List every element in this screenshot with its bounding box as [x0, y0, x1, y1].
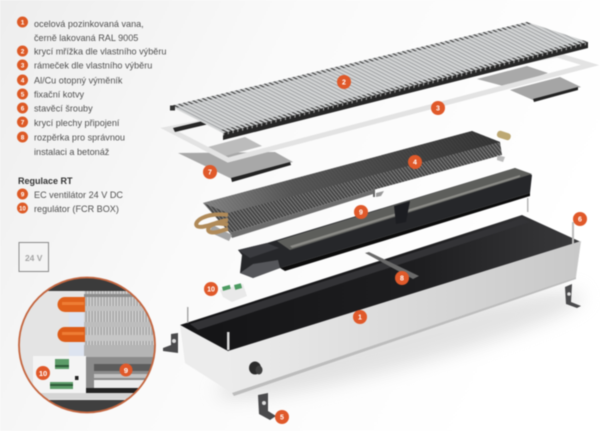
legend item 1: 1 — [21, 20, 25, 26]
detail circle: pipes and regulator — [15, 275, 160, 415]
legend item 9: EC ventilátor 24 V DC — [34, 190, 123, 200]
legend item 10: 10 — [19, 206, 26, 212]
legend: regulation list — [17, 188, 123, 214]
legend item 4: Al/Cu otopný výměník — [34, 76, 123, 86]
icon: 24 V box — [19, 242, 48, 272]
regulator box — [220, 283, 247, 302]
badge 1: 1 — [358, 314, 362, 322]
legend item 8 — [17, 132, 125, 157]
badge 6 — [573, 212, 587, 226]
legend: component list — [17, 16, 166, 157]
regulator board — [50, 359, 78, 389]
legend item 9: 9 — [21, 192, 25, 198]
legend item 8: 8 — [21, 134, 25, 142]
badge 9: 9 — [359, 210, 363, 216]
legend item 2: 2 — [21, 48, 25, 56]
badge 10 in circle — [36, 366, 50, 380]
frame — [168, 55, 590, 160]
legend item 7: krycí plechy připojení — [34, 118, 120, 128]
legend item 8: rozpěrka pro správnou — [34, 132, 125, 142]
badge 8 — [395, 271, 409, 285]
tub — [180, 215, 581, 396]
orange pipes — [58, 297, 85, 342]
badge 2: 2 — [342, 80, 346, 86]
legend item 5: 5 — [21, 92, 25, 98]
badge 4 — [408, 155, 422, 169]
badge 4: 4 — [413, 160, 417, 166]
legend item 8: instalaci a betonáž — [34, 147, 110, 157]
legend item 6: 6 — [21, 106, 25, 112]
legend item 4: 4 — [21, 78, 25, 84]
shadow below tub — [211, 275, 589, 415]
legend item 2: krycí mřížka dle vlastního výběru — [34, 46, 166, 56]
legend item 10: regulátor (FCR BOX) — [34, 204, 119, 214]
badge 7 — [203, 165, 217, 179]
legend item 1: černě lakovaná RAL 9005 — [34, 33, 138, 43]
badge 3 — [431, 101, 445, 115]
legend item 1: ocelová pozinkovaná vana, — [34, 19, 144, 29]
badge 8: 8 — [400, 276, 404, 282]
badge 6: 6 — [578, 216, 582, 224]
legend item 7: 7 — [21, 120, 25, 126]
cable gland — [249, 362, 262, 374]
badge 5 — [275, 410, 289, 424]
anchor bracket, right — [565, 284, 581, 308]
badge 2 — [337, 75, 351, 89]
brass fittings — [496, 130, 512, 141]
badge 10 — [204, 282, 218, 296]
anchor bracket, front — [258, 393, 276, 420]
EC fan unit — [238, 168, 532, 278]
cover plates, left — [178, 137, 293, 182]
badge 3: 3 — [436, 106, 440, 112]
badge 10 in circle: 10 — [39, 369, 47, 378]
legend item 5: fixační kotvy — [34, 90, 84, 100]
legend item 5 — [17, 88, 84, 100]
cover plates, right — [477, 66, 581, 102]
spacer bar — [365, 252, 419, 279]
heat exchanger — [196, 130, 512, 241]
grille — [170, 22, 588, 140]
heading: Regulace RT: Regulace RT — [18, 176, 73, 186]
badge 9 — [354, 205, 368, 219]
badge 7: 7 — [208, 170, 212, 176]
icon: 24 V box: 24 V — [25, 253, 43, 263]
badge 5: 5 — [280, 414, 284, 422]
badge 10: 10 — [207, 286, 215, 294]
adjusting screw — [572, 222, 574, 244]
legend item 6: stavěcí šrouby — [34, 104, 93, 114]
copper pipes — [196, 214, 228, 233]
legend item 1 — [17, 16, 144, 43]
badge 9 in circle — [120, 364, 132, 376]
legend item 3: rámeček dle vlastního výběru — [34, 60, 152, 70]
legend item 3: 3 — [21, 62, 25, 70]
anchor bracket, left — [163, 333, 178, 353]
badge 9 in circle: 9 — [124, 366, 128, 375]
badge 1 — [353, 310, 367, 324]
